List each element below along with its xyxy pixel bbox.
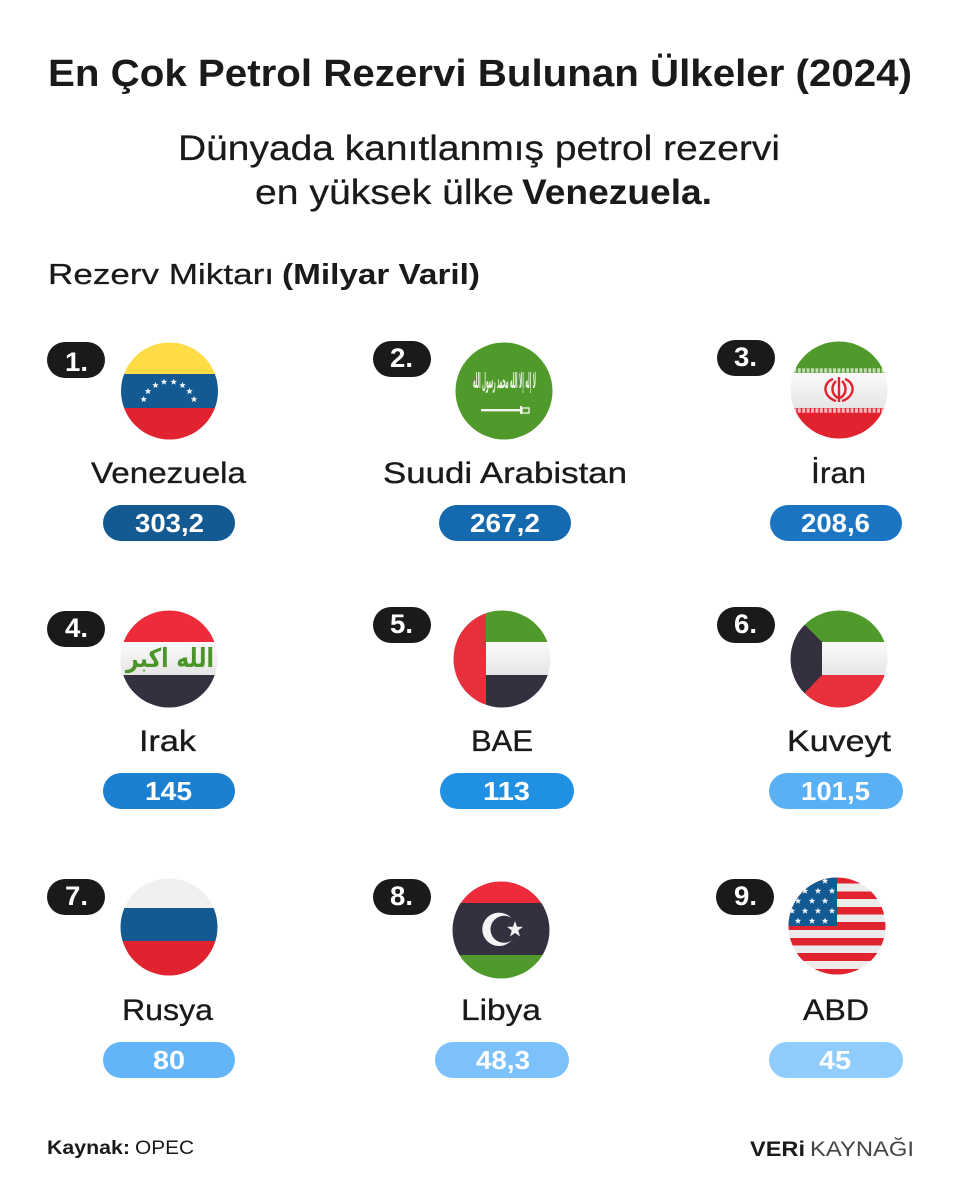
value pill: 208,6 — [801, 508, 870, 538]
rank badge 6 — [717, 607, 775, 643]
rank badge 8: 8. — [390, 881, 413, 911]
rank badge 1 — [47, 342, 105, 378]
value pill — [435, 1042, 569, 1078]
value pill: 101,5 — [801, 776, 870, 806]
country name: Irak — [139, 725, 197, 758]
rank badge 1: 1. — [65, 347, 88, 377]
panel: Kuveyt — [717, 607, 903, 809]
brand logo: VERi — [750, 1138, 805, 1161]
country name: Kuveyt — [787, 725, 892, 758]
icon: flag of UAE — [452, 609, 552, 709]
rank badge 2 — [373, 341, 431, 377]
rank badge 2: 2. — [390, 343, 413, 373]
icon: flag of Libya — [451, 880, 551, 980]
panel: Libya — [373, 879, 569, 1078]
value pill: 48,3 — [476, 1045, 530, 1075]
rank badge 5 — [373, 607, 431, 643]
rank badge 7 — [47, 879, 105, 915]
value pill — [770, 505, 902, 541]
title: En Çok Petrol Rezervi Bulunan Ülkeler (2024) — [48, 52, 912, 95]
value pill — [440, 773, 574, 809]
rank badge 3: 3. — [734, 342, 757, 372]
source — [47, 1138, 194, 1159]
panel: Irak — [47, 609, 235, 809]
rank badge 4 — [47, 611, 105, 647]
value pill: 80 — [153, 1045, 185, 1075]
value pill — [769, 773, 903, 809]
chart heading — [48, 259, 480, 291]
rank badge 3 — [717, 340, 775, 376]
icon: flag of USA — [787, 876, 887, 976]
value pill: 45 — [819, 1045, 851, 1075]
brand logo: KAYNAĞI — [810, 1138, 914, 1161]
rank badge 6: 6. — [734, 609, 757, 639]
country name: Venezuela — [91, 457, 246, 490]
icon: flag of Saudi Arabia — [454, 341, 554, 441]
subtitle: Venezuela. — [522, 173, 712, 212]
panel: Suudi Arabistan — [373, 341, 627, 541]
value pill: 303,2 — [135, 508, 204, 538]
value pill: 113 — [483, 776, 530, 806]
subtitle: en yüksek ülke — [255, 173, 514, 212]
source: OPEC — [135, 1138, 194, 1159]
icon: flag of Iraq: الله اكبر — [124, 644, 214, 674]
value pill — [439, 505, 571, 541]
icon: flag of Iran — [789, 340, 889, 441]
rank badge 5: 5. — [390, 609, 413, 639]
icon: flag of Russia — [119, 877, 219, 977]
rank badge 4: 4. — [65, 613, 88, 643]
rank badge 9: 9. — [734, 881, 757, 911]
icon: flag of Venezuela — [120, 341, 220, 441]
chart heading: Rezerv Miktarı — [48, 259, 274, 291]
country name: ABD — [803, 994, 869, 1027]
icon: flag of Kuwait — [789, 609, 889, 709]
brand logo — [750, 1138, 914, 1161]
subtitle — [178, 129, 780, 212]
value pill — [103, 505, 235, 541]
chart heading: (Milyar Varil) — [282, 259, 480, 291]
value pill — [769, 1042, 903, 1078]
value pill: 145 — [145, 776, 192, 806]
panel: İran — [717, 340, 902, 541]
country name: BAE — [471, 725, 533, 758]
value pill — [103, 773, 235, 809]
rank badge 9 — [716, 879, 774, 915]
country name: İran — [811, 457, 866, 490]
panel: Rusya — [47, 877, 235, 1078]
panel: BAE — [373, 607, 574, 809]
icon: flag of Iraq — [119, 609, 219, 709]
panel: ABD — [716, 876, 903, 1078]
country name: Rusya — [122, 994, 213, 1027]
subtitle: Dünyada kanıtlanmış petrol rezervi — [178, 129, 780, 168]
country name: Suudi Arabistan — [383, 457, 627, 490]
panel: Venezuela — [47, 341, 246, 541]
value pill — [103, 1042, 235, 1078]
value pill: 267,2 — [470, 508, 540, 538]
rank badge 8 — [373, 879, 431, 915]
rank badge 7: 7. — [65, 881, 88, 911]
country name: Libya — [461, 994, 541, 1027]
panel: Suudi Arabistan: لا إله إلا الله محمد رسول الله — [473, 369, 536, 393]
source: Kaynak: — [47, 1138, 130, 1159]
